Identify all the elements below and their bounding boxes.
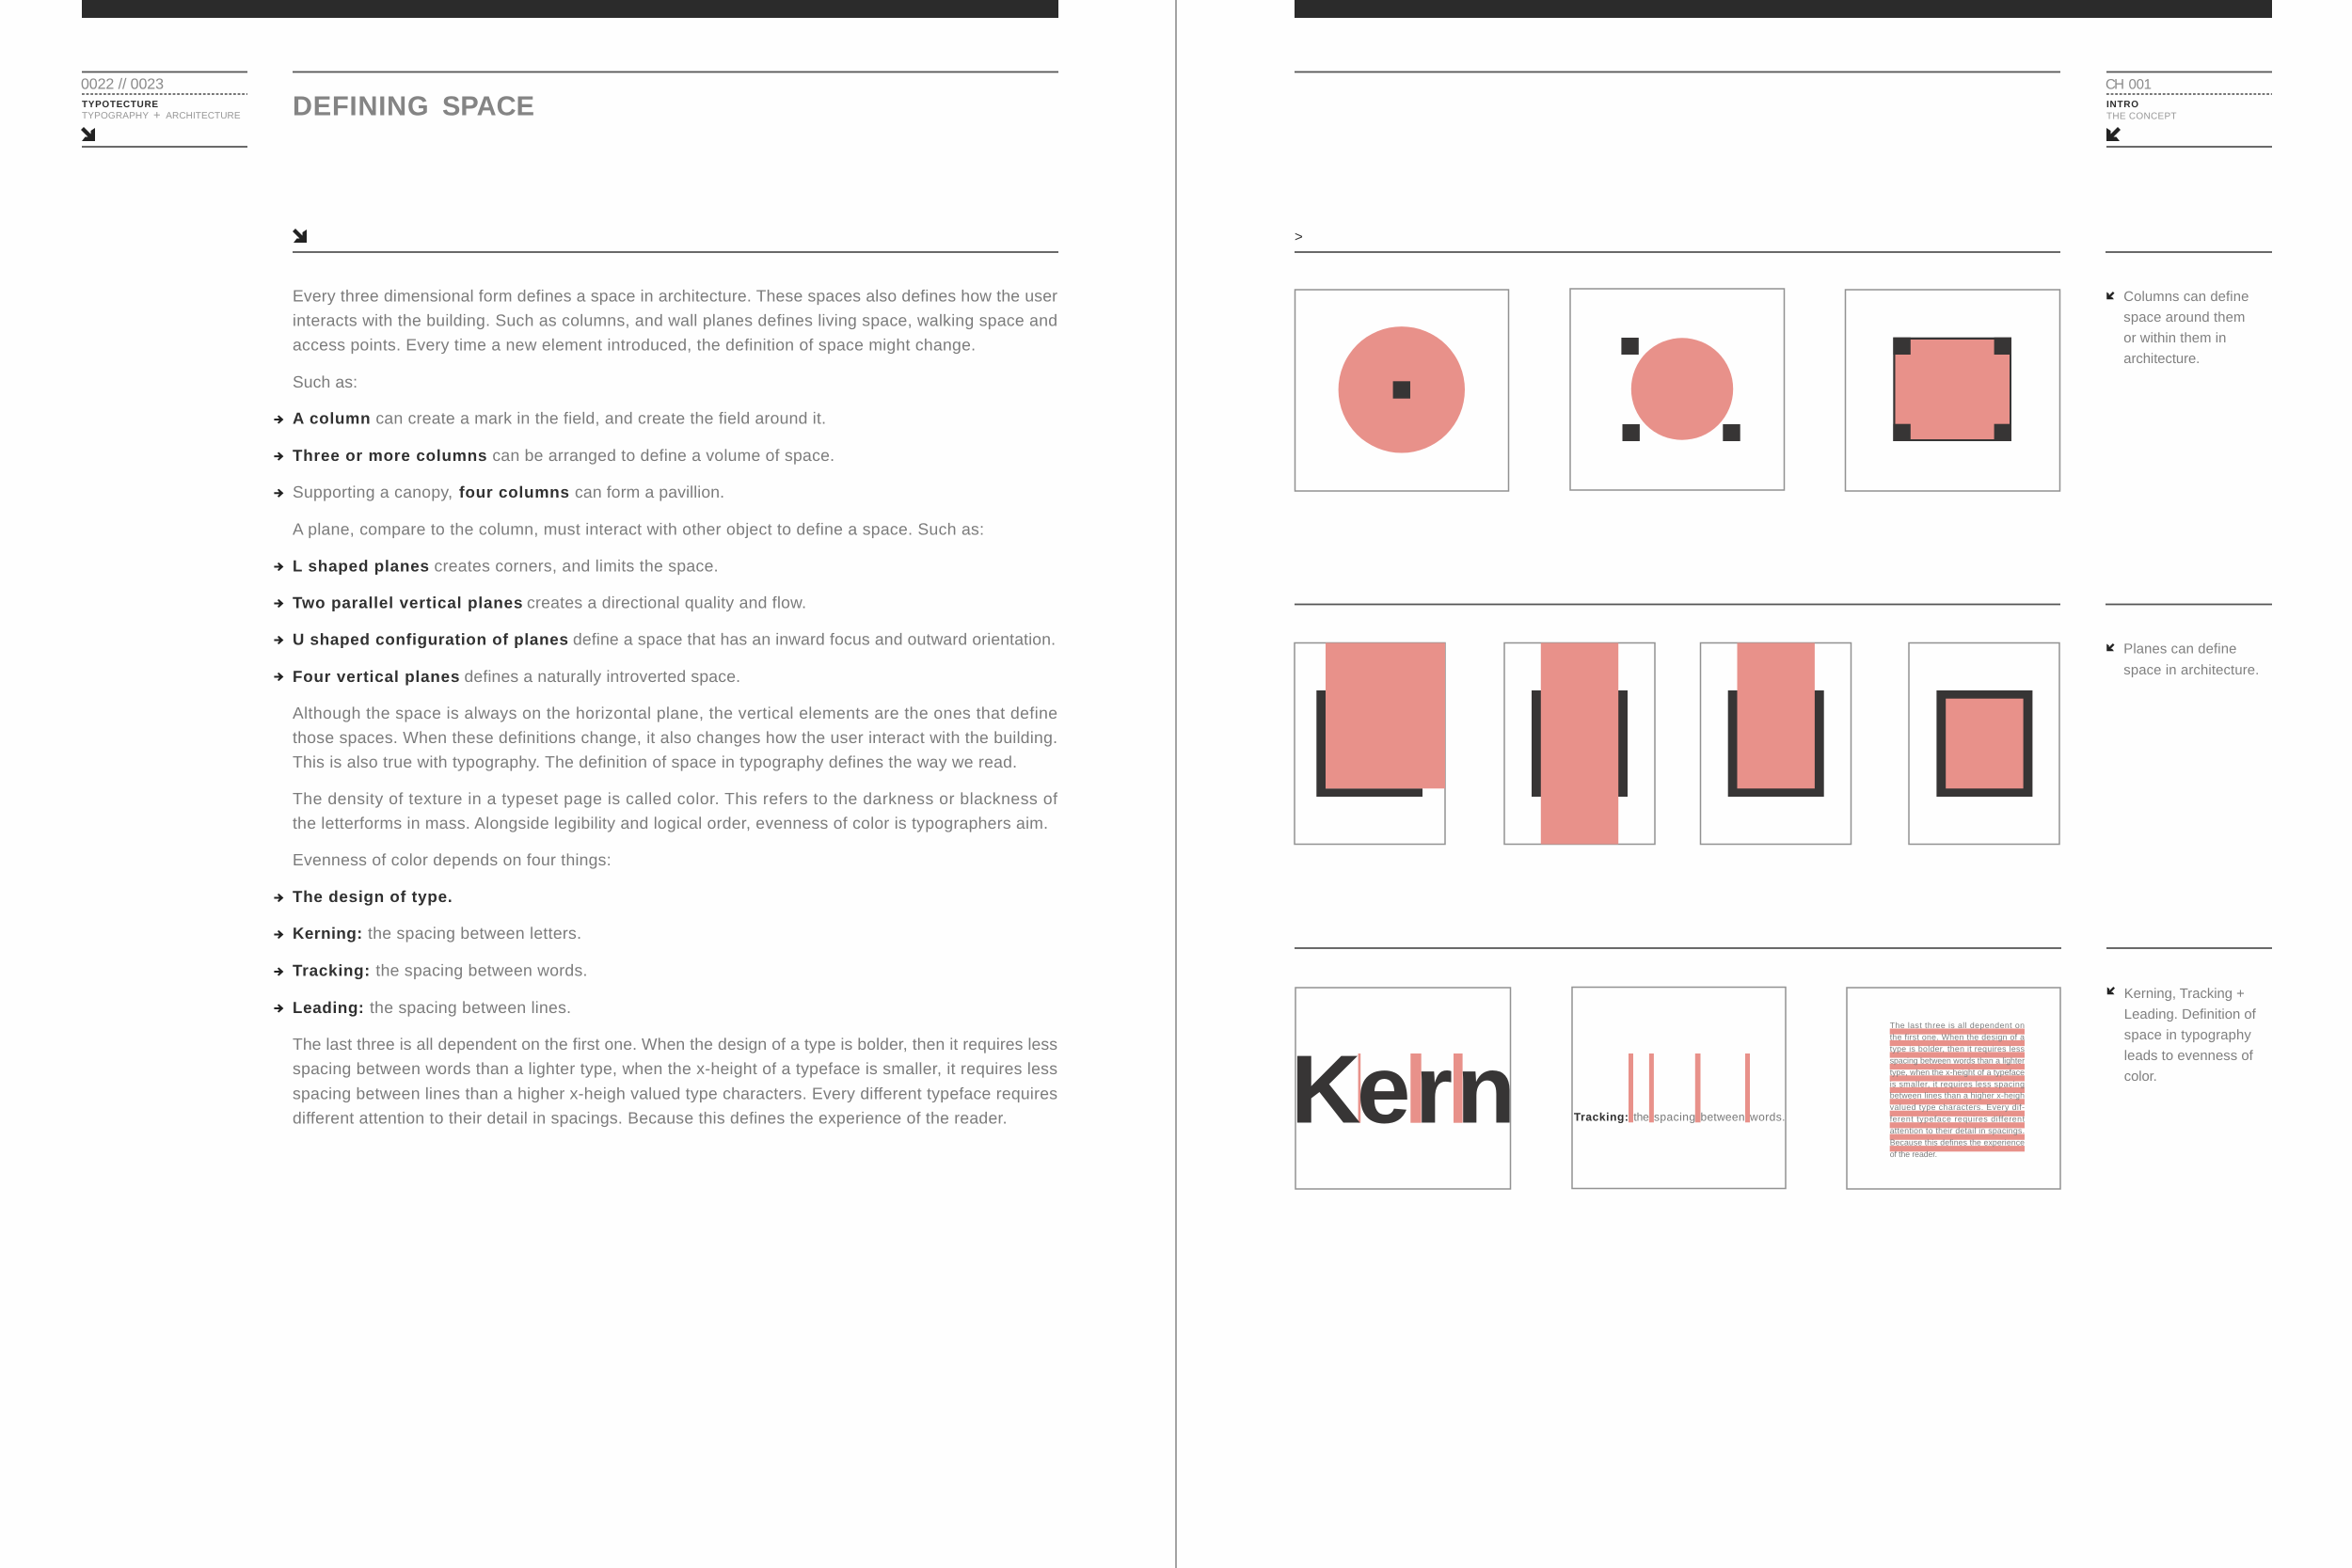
paragraph: colour density: The density of texture in a typeset page is called color. This refers to the darkness or blackness of bbox=[293, 789, 1057, 808]
diagram: leading: between lines than a higher x-heigh bbox=[1890, 1091, 2025, 1101]
top bar left bbox=[82, 0, 1058, 18]
bullet: L shaped planes: L shaped planes bbox=[293, 557, 429, 576]
diagram: leading: the first one. When the design of a bbox=[1890, 1032, 2025, 1041]
paragraph: colour density bbox=[293, 789, 1057, 832]
bullet: kerning: Kerning: bbox=[293, 925, 362, 942]
heading: SPACE bbox=[442, 92, 534, 122]
diagram: kerning: Kern bbox=[1291, 1036, 1516, 1144]
diagram: leading: type is bolder, then it requires less bbox=[1890, 1044, 2026, 1053]
bullet: two parallel planes bbox=[274, 594, 806, 612]
subtitle bbox=[82, 107, 241, 122]
paragraph: colour density: the letterforms in mass. Alongside legibility and logical order, evenness of color is typographers aim. bbox=[293, 814, 1048, 832]
diagram: leading: is smaller, it requires less spacing bbox=[1890, 1079, 2025, 1088]
bullet: U shaped planes bbox=[274, 630, 1056, 649]
paragraph: vertical elements: Although the space is always on the horizontal plane, the vertical elements are the ones that define bbox=[293, 704, 1057, 722]
caption: kerning, tracking, leading: color. bbox=[2124, 1069, 2157, 1085]
intro paragraph: access points. Every time a new element introduced, the definition of space might change. bbox=[293, 336, 976, 355]
book title: TYPOTECTURE bbox=[82, 100, 158, 110]
diagram: tracking: the bbox=[1633, 1111, 1649, 1124]
subtitle: + bbox=[153, 107, 161, 122]
closing paragraph: spacing between lines than a higher x-heigh valued type characters. Every different typeface requires bbox=[293, 1084, 1057, 1102]
closing paragraph: spacing between words than a lighter type, when the x-height of a typeface is smaller, it requires less bbox=[293, 1059, 1057, 1078]
bullet: kerning: the spacing between letters. bbox=[368, 924, 581, 942]
row: typography diagrams bbox=[1291, 988, 2060, 1189]
intro paragraph: Every three dimensional form defines a space in architecture. These spaces also defines how the user bbox=[293, 287, 1057, 306]
bullet: leading bbox=[274, 998, 571, 1017]
paragraph: vertical elements bbox=[293, 704, 1057, 771]
caption: kerning, tracking, leading: Leading. Definition of bbox=[2124, 1007, 2257, 1022]
chapter number: 001 bbox=[2128, 76, 2152, 92]
diagram: four planes bbox=[1909, 643, 2059, 845]
bullet: three or more columns: Three or more columns bbox=[293, 447, 487, 465]
heading bbox=[293, 71, 1058, 122]
diagram: leading bbox=[1847, 988, 2060, 1189]
evenness line: Evenness of color depends on four things: bbox=[293, 850, 612, 869]
diagram: kerning bbox=[1291, 988, 1516, 1189]
bullet: three or more columns bbox=[274, 446, 834, 465]
closing paragraph: different attention to their detail in spacings. Because this defines the experience of the reader. bbox=[293, 1108, 1007, 1127]
bullet: leading: the spacing between lines. bbox=[370, 998, 571, 1017]
diagram: tracking: words. bbox=[1749, 1111, 1786, 1124]
heading: DEFINING bbox=[293, 92, 429, 122]
chapter name: INTRO bbox=[2106, 100, 2138, 110]
bullet: tracking: the spacing between words. bbox=[375, 961, 587, 980]
diagram: U shaped plane bbox=[1701, 643, 1851, 845]
left header block bbox=[81, 71, 247, 147]
diagram: single column bbox=[1295, 290, 1509, 491]
body text bbox=[274, 287, 1057, 1127]
chapter number: CH bbox=[2106, 76, 2124, 92]
page numbers: 0022 // 0023 bbox=[81, 77, 164, 93]
chapter header block bbox=[2106, 71, 2272, 252]
diagram: three columns bbox=[1570, 289, 1784, 490]
bullet: L shaped planes bbox=[274, 557, 719, 576]
caption: columns: architecture. bbox=[2123, 352, 2200, 367]
bullet: four columns: four columns bbox=[459, 483, 569, 501]
caption: kerning, tracking, leading bbox=[2107, 987, 2257, 1085]
caption: planes bbox=[2106, 642, 2259, 678]
bullet: kerning bbox=[274, 924, 581, 942]
diagram: leading: The last three is all dependent on bbox=[1890, 1021, 2025, 1030]
rule row 2 bbox=[1295, 604, 2060, 606]
paragraph: vertical elements: This is also true with typography. The definition of space in typography defines the way we read. bbox=[293, 752, 1017, 771]
caption: columns: Columns can define bbox=[2123, 290, 2249, 305]
closing paragraph bbox=[293, 1035, 1057, 1127]
bullet: U shaped planes: define a space that has an inward focus and outward orientation. bbox=[573, 630, 1056, 649]
diagram: parallel planes bbox=[1504, 643, 1655, 845]
caption: kerning, tracking, leading: Kerning, Tracking + bbox=[2124, 987, 2245, 1002]
diagram: leading: type, when the x-height of a typeface bbox=[1890, 1068, 2025, 1077]
closing paragraph: The last three is all dependent on the first one. When the design of a type is bolder, then it requires less bbox=[293, 1035, 1057, 1053]
bullet: four vertical planes: defines a naturally introverted space. bbox=[465, 667, 740, 686]
centre fold line bbox=[1175, 0, 1177, 1568]
bullet: a column: can create a mark in the field, and create the field around it. bbox=[375, 409, 826, 428]
diagram: four columns canopy bbox=[1846, 290, 2060, 491]
subtitle: TYPOGRAPHY bbox=[82, 111, 149, 121]
caption: planes: Planes can define bbox=[2123, 642, 2236, 657]
chevron marker: > bbox=[1295, 230, 1303, 245]
icon: south-west arrow bbox=[2106, 127, 2121, 141]
bullet: four vertical planes bbox=[274, 667, 740, 686]
top bar right bbox=[1295, 0, 2272, 18]
plane paragraph: A plane, compare to the column, must interact with other object to define a space. Such as: bbox=[293, 519, 984, 538]
rule row 2 side bbox=[2106, 604, 2272, 606]
diagram: leading: valued type characters. Every dif- bbox=[1890, 1102, 2025, 1112]
left page bbox=[81, 0, 1058, 1127]
rule row 3 side bbox=[2106, 947, 2272, 949]
rule row 3 bbox=[1295, 947, 2061, 949]
row: columns diagrams bbox=[1295, 289, 2060, 491]
chapter subtitle: THE CONCEPT bbox=[2106, 111, 2177, 121]
caption: columns: or within them in bbox=[2123, 331, 2226, 346]
such as: Such as: bbox=[293, 372, 358, 391]
bullet: four columns: can form a pavillion. bbox=[575, 483, 724, 501]
caption: columns bbox=[2106, 290, 2249, 367]
bullet: four columns bbox=[274, 483, 724, 501]
subtitle: ARCHITECTURE bbox=[166, 111, 241, 121]
bullet: tracking bbox=[274, 961, 587, 980]
caption: kerning, tracking, leading: space in typography bbox=[2124, 1028, 2251, 1043]
bullet: two parallel planes: Two parallel vertical planes bbox=[293, 594, 523, 612]
diagram: tracking: Tracking: bbox=[1574, 1111, 1629, 1124]
diagram: leading: of the reader. bbox=[1890, 1149, 1937, 1159]
right page bbox=[1291, 0, 2272, 1189]
diagram: leading: spacing between words than a lighter bbox=[1890, 1055, 2025, 1065]
bullet: leading: Leading: bbox=[293, 999, 364, 1017]
diagram: tracking: spacing bbox=[1654, 1111, 1695, 1124]
bullet: tracking: Tracking: bbox=[293, 962, 370, 980]
bullet: three or more columns: can be arranged to define a volume of space. bbox=[492, 446, 834, 465]
chapter number bbox=[2106, 76, 2152, 92]
bullet: two parallel planes: creates a directional quality and flow. bbox=[527, 594, 806, 612]
intro paragraph: interacts with the building. Such as columns, and wall planes defines living space, walking space and bbox=[293, 311, 1057, 330]
intro paragraph bbox=[293, 287, 1057, 355]
bullet: L shaped planes: creates corners, and limits the space. bbox=[435, 557, 719, 576]
row: planes diagrams bbox=[1295, 643, 2059, 845]
diagram: tracking: between bbox=[1701, 1111, 1744, 1124]
bullet: four vertical planes: Four vertical planes bbox=[293, 668, 459, 686]
caption: kerning, tracking, leading: leads to evenness of bbox=[2124, 1049, 2254, 1064]
diagram: tracking bbox=[1572, 988, 1786, 1189]
bullet: a column: A column bbox=[293, 410, 371, 428]
caption: planes: space in architecture. bbox=[2123, 663, 2259, 678]
diagram: leading: attention to their detail in spacings. bbox=[1890, 1126, 2025, 1135]
bullet: U shaped planes: U shaped configuration of planes bbox=[293, 631, 568, 649]
diagram: leading: Because this defines the experience bbox=[1890, 1138, 2025, 1148]
paragraph: vertical elements: those spaces. When these definitions change, it also changes how the user interact with the building. bbox=[293, 728, 1057, 747]
diagram: L shaped plane bbox=[1295, 643, 1445, 845]
diagram: leading: ferent typeface requires different bbox=[1890, 1115, 2026, 1124]
caption: columns: space around them bbox=[2123, 310, 2245, 325]
bullet: design of type: The design of type. bbox=[293, 888, 453, 906]
bullet: four columns: Supporting a canopy, bbox=[293, 483, 453, 501]
icon: south-east arrow bbox=[81, 127, 95, 141]
section marker bbox=[293, 229, 1058, 252]
